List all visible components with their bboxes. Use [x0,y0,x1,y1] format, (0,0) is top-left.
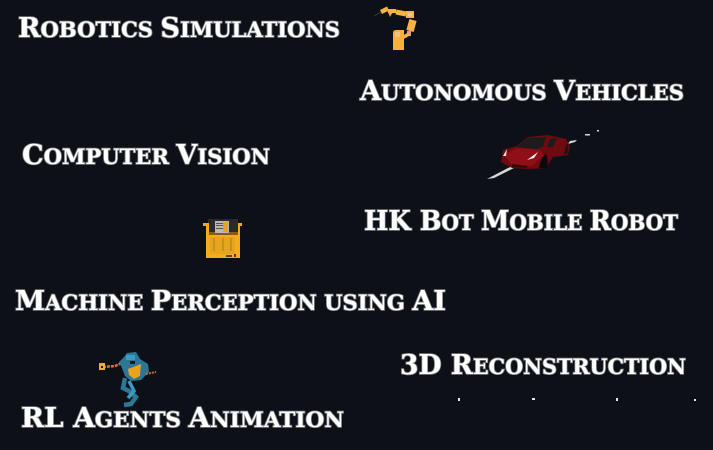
icon: red sports car on road [487,130,599,179]
icon: robotic arm [374,8,414,50]
heading: Autonomous Vehicles: AUTONOMOUS VEHICLES [359,76,684,107]
heading: HK Bot Mobile Robot: HK BOT MOBILE ROBOT [364,206,678,237]
heading: RL Agents Animation: RL AGENTS ANIMATION [21,403,344,434]
heading: Computer Vision: COMPUTER VISION [22,140,270,171]
heading: Robotics Simulations: ROBOTICS SIMULATIONS [18,13,340,44]
heading: 3D Reconstruction: 3D RECONSTRUCTION [400,350,686,381]
row of reconstruction dots [458,398,696,401]
heading: Machine Perception using AI: MACHINE PERCEPTION USING AI [15,286,446,317]
icon: animated robot agent [99,352,156,405]
icon: floppy disk [203,219,242,258]
